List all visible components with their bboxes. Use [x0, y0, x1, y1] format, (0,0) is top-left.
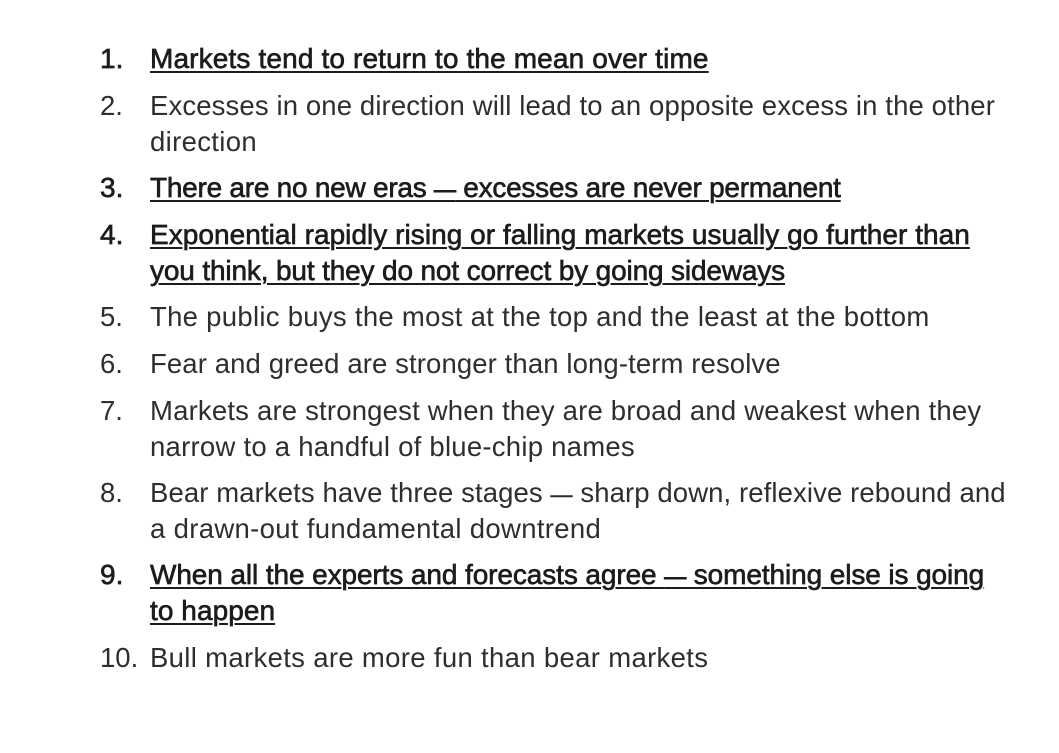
item 9	[100, 559, 984, 626]
item 6: 6.	[100, 348, 123, 379]
item 4	[100, 219, 970, 286]
item 7: Markets are strongest when they are broad and weakest when they	[150, 395, 981, 426]
item 2: Excesses in one direction will lead to an opposite excess in the other	[150, 90, 995, 121]
item 8: Bear markets have three stages — sharp down, reflexive rebound and	[150, 477, 1006, 508]
item 3: There are no new eras — excesses are never permanent	[150, 172, 841, 203]
item 9: 9.	[100, 559, 123, 590]
item 8: 8.	[100, 477, 123, 508]
item 5: 5.	[100, 301, 123, 332]
item 9: to happen	[150, 595, 275, 626]
item 5: The public buys the most at the top and the least at the bottom	[150, 301, 930, 332]
item 9: When all the experts and forecasts agree — something else is going	[150, 559, 984, 590]
item 1: 1.	[100, 43, 123, 74]
item 4: you think, but they do not correct by going sideways	[150, 255, 785, 286]
item 6: Fear and greed are stronger than long-term resolve	[150, 348, 781, 379]
item 10: 10.	[100, 642, 138, 673]
item 4: 4.	[100, 219, 123, 250]
item 8	[100, 477, 1006, 544]
item 4: Exponential rapidly rising or falling markets usually go further than	[150, 219, 970, 250]
item 8: a drawn-out fundamental downtrend	[150, 513, 601, 544]
item 7	[100, 395, 981, 462]
item 7: narrow to a handful of blue-chip names	[150, 431, 635, 462]
item 2	[100, 90, 995, 157]
item 1: Markets tend to return to the mean over time	[150, 43, 709, 74]
item 2: direction	[150, 126, 257, 157]
item 3: 3.	[100, 172, 123, 203]
item 2: 2.	[100, 90, 123, 121]
item 10: Bull markets are more fun than bear markets	[150, 642, 708, 673]
item 7: 7.	[100, 395, 123, 426]
